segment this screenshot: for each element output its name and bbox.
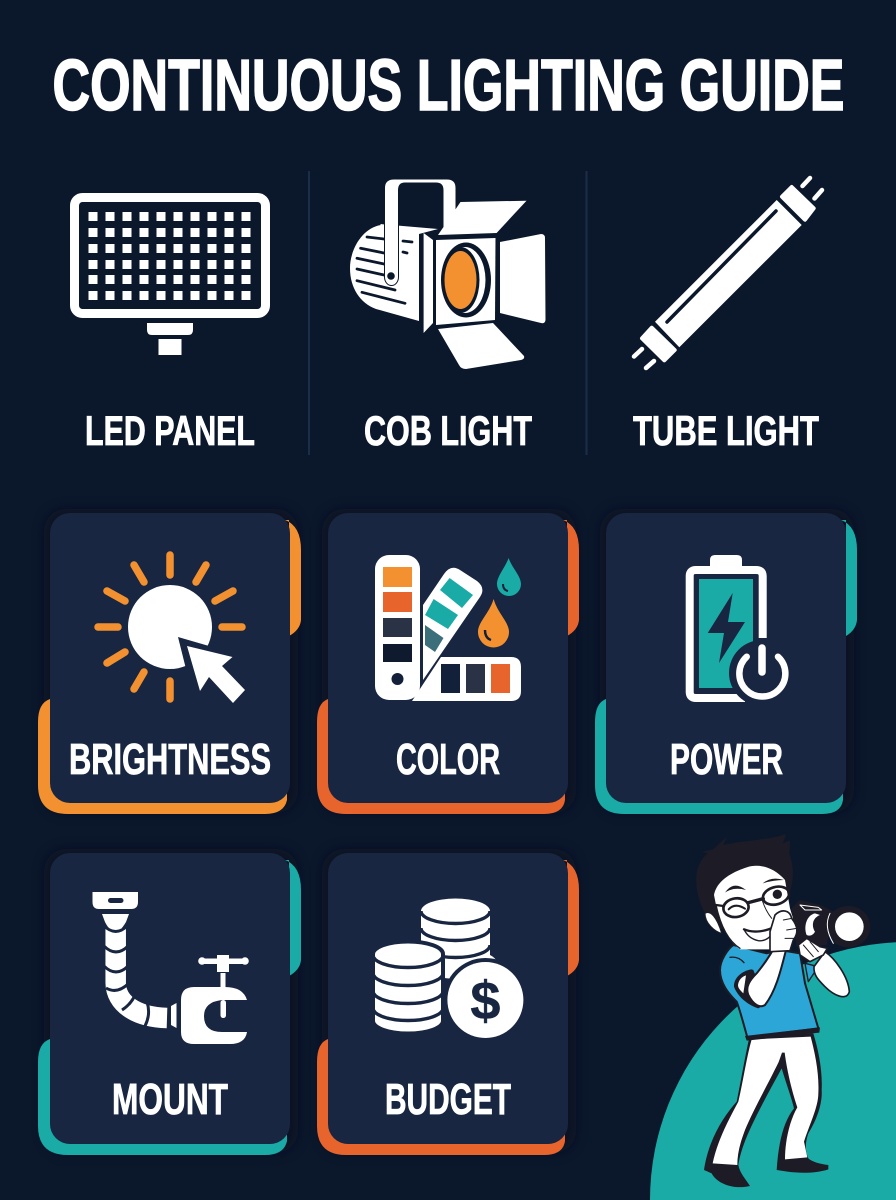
- panel: budget card: [317, 849, 579, 1155]
- icon: tube light: [634, 178, 822, 368]
- panel: power card: [595, 509, 857, 814]
- icon: COB fresnel light: [350, 179, 546, 369]
- label: budget: BUDGET: [385, 1075, 511, 1124]
- lower hand: [798, 938, 827, 962]
- panel: COB light: [350, 179, 546, 454]
- icon: color swatches and drops: [375, 555, 521, 701]
- label: LED panel: LED PANEL: [85, 407, 255, 454]
- label: tube light: TUBE LIGHT: [633, 407, 819, 454]
- illustration: photographer: [696, 834, 870, 1187]
- panel: LED panel: [74, 198, 266, 454]
- label: mount: MOUNT: [112, 1075, 228, 1124]
- legs and shoes: [704, 1033, 828, 1187]
- icon: battery with power button: [690, 555, 795, 706]
- teal circle behind photographer: [650, 942, 896, 1200]
- label: power: POWER: [670, 735, 783, 784]
- panel: tube light: [633, 178, 822, 454]
- torso and arms: [720, 940, 849, 1041]
- label: color: COLOR: [396, 735, 500, 784]
- icon: flexible arm and clamp: [92, 892, 249, 1044]
- icon: sun with cursor: [98, 555, 250, 712]
- label: COB light: COB LIGHT: [364, 407, 532, 454]
- head and camera: [696, 834, 870, 952]
- panel: color card: [317, 509, 579, 814]
- icon: LED panel: [74, 198, 266, 355]
- panel: brightness card: [38, 509, 301, 814]
- icon: coin stacks with dollar: [373, 898, 527, 1042]
- icon: coin stacks with dollar: $: [470, 971, 500, 1031]
- label: brightness: BRIGHTNESS: [69, 735, 271, 784]
- panel: mount card: [38, 849, 301, 1155]
